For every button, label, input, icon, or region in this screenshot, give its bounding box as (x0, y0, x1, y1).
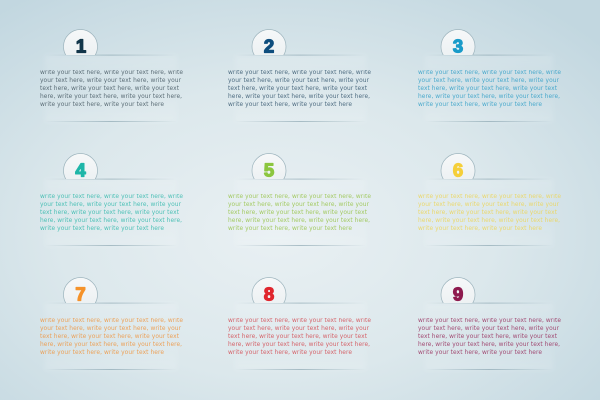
text block 8 (228, 318, 371, 356)
panel: item 7 (40, 278, 183, 370)
icon: number badge 3 (440, 29, 476, 55)
text block 4: text here, write your text here, write your text (40, 210, 180, 216)
text block 1: your text here, write your text here, write your (40, 78, 182, 84)
text block 5 (228, 194, 371, 232)
icon: number badge 4 (63, 153, 98, 179)
text block 7: your text here, write your text here, write your (40, 326, 182, 332)
text block 9: write your text here, write your text here (418, 350, 542, 356)
icon: number badge 9: 9 (453, 284, 463, 304)
text block 6: your text here, write your text here, write your (418, 202, 560, 208)
icon: number badge 2: 2 (264, 36, 274, 56)
icon: number badge 8 (252, 277, 286, 303)
text block 1 (40, 70, 183, 108)
panel: item 6 (418, 154, 561, 246)
text block 3: write your text here, write your text here, write (418, 70, 561, 76)
text block 4: here, write your text here, write your text here, (40, 218, 182, 224)
panel: item 2 (228, 30, 371, 122)
panel: item 3 (418, 30, 561, 122)
text block 2: your text here, write your text here, write your (228, 78, 370, 84)
icon: number badge 6: 6 (453, 160, 463, 180)
icon: number badge 7: 7 (75, 284, 86, 304)
text block 8: write your text here, write your text here, write (228, 318, 371, 324)
icon: number badge 1: 1 (76, 36, 86, 56)
panel: item 5 (228, 154, 371, 246)
text block 9: write your text here, write your text here, write (418, 318, 561, 324)
text block 1: write your text here, write your text here (40, 102, 164, 108)
text block 7: text here, write your text here, write your text (40, 334, 180, 340)
text block 3: your text here, write your text here, write your (418, 78, 560, 84)
text block 8: write your text here, write your text here (228, 350, 352, 356)
text block 3 (418, 70, 561, 108)
text block 2 (228, 70, 371, 108)
text block 5: write your text here, write your text here (228, 226, 352, 232)
text block 2: write your text here, write your text here (228, 102, 352, 108)
text block 4: write your text here, write your text here, write (40, 194, 183, 200)
text block 7: write your text here, write your text here (40, 350, 164, 356)
icon: number badge 5 (252, 153, 286, 179)
text block 2: write your text here, write your text here, write (228, 70, 371, 76)
icon: number badge 6 (440, 153, 476, 179)
text block 8: text here, write your text here, write your text (228, 334, 368, 340)
text block 9: here, write your text here, write your text here, (418, 342, 560, 348)
panel: item 4 (40, 154, 183, 246)
text block 7 (40, 318, 183, 356)
icon: number badge 7 (63, 277, 98, 303)
text block 1: write your text here, write your text here, write (40, 70, 183, 76)
text block 5: write your text here, write your text here, write (228, 194, 371, 200)
text block 7: here, write your text here, write your text here, (40, 342, 182, 348)
text block 1: here, write your text here, write your text here, (40, 94, 182, 100)
text block 6: here, write your text here, write your text here, (418, 218, 560, 224)
icon: number badge 2 (252, 29, 286, 55)
text block 6 (418, 194, 561, 232)
text block 7: write your text here, write your text here, write (40, 318, 183, 324)
text block 3: here, write your text here, write your text here, (418, 94, 560, 100)
panel: item 9 (418, 278, 561, 370)
text block 8: your text here, write your text here, write your (228, 326, 370, 332)
icon: number badge 5: 5 (264, 160, 274, 180)
text block 2: text here, write your text here, write your text (228, 86, 368, 92)
panel: item 1 (40, 30, 183, 122)
text block 5: text here, write your text here, write your text (228, 210, 368, 216)
text block 9: your text here, write your text here, write your (418, 326, 560, 332)
text block 4: write your text here, write your text here (40, 226, 164, 232)
text block 6: text here, write your text here, write your text (418, 210, 558, 216)
text block 8: here, write your text here, write your text here, (228, 342, 370, 348)
text block 5: here, write your text here, write your text here, (228, 218, 370, 224)
icon: number badge 3: 3 (453, 36, 463, 56)
panel: item 8 (228, 278, 371, 370)
icon: number badge 1 (63, 29, 98, 55)
text block 2: here, write your text here, write your text here, (228, 94, 370, 100)
text block 3: text here, write your text here, write your text (418, 86, 558, 92)
text block 6: write your text here, write your text here (418, 226, 542, 232)
text block 1: text here, write your text here, write your text (40, 86, 180, 92)
text block 4 (40, 194, 183, 232)
text block 9 (418, 318, 561, 356)
text block 3: write your text here, write your text here (418, 102, 542, 108)
text block 4: your text here, write your text here, write your (40, 202, 182, 208)
icon: number badge 9 (440, 277, 476, 303)
icon: number badge 4: 4 (75, 160, 86, 180)
text block 9: text here, write your text here, write your text (418, 334, 558, 340)
text block 6: write your text here, write your text here, write (418, 194, 561, 200)
text block 5: your text here, write your text here, write your (228, 202, 370, 208)
icon: number badge 8: 8 (264, 284, 274, 304)
